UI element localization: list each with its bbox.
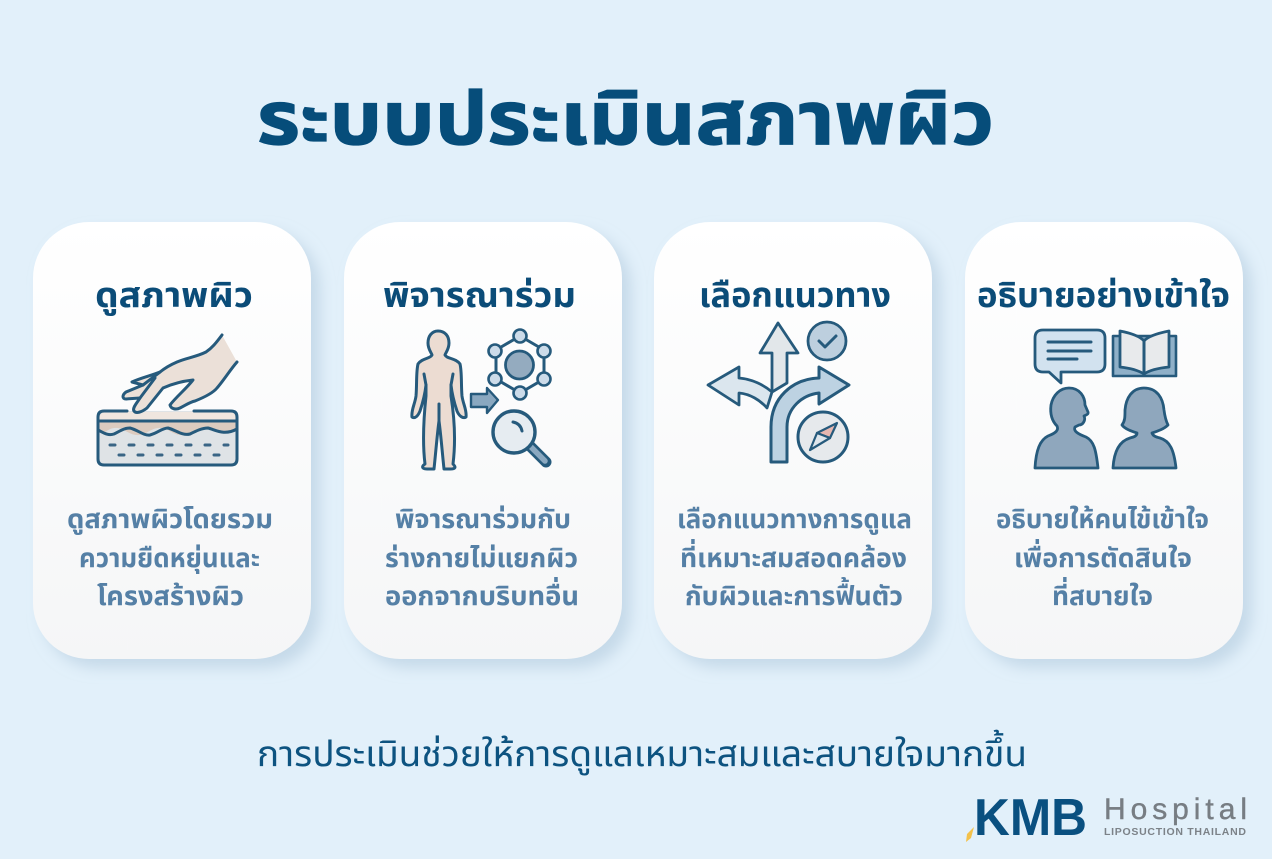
icon: hand on skin [98,335,237,465]
description: consider together [385,504,579,611]
heading: consider together: พิจารณาร่วม [383,276,576,315]
heading: look at skin: ดูสภาพผิว [95,276,253,316]
logo tagline: LIPOSUCTION THAILAND [1104,826,1246,838]
description: choose approach [677,504,912,611]
description: look at skin: ดูสภาพผิวโดยรวม [67,504,273,535]
description: look at skin [67,504,273,611]
panel: consider together [344,222,622,659]
description: explain clearly: อธิบายให้คนไข้เข้าใจ [996,504,1209,534]
description: choose approach: เลือกแนวทางการดูแล [677,504,912,535]
description: explain clearly [996,504,1209,611]
logo: KMB Hospital [966,789,1247,847]
title: ระบบประเมินสภาพผิว [257,77,994,160]
panel: look at skin [33,222,311,659]
heading: explain clearly: อธิบายอย่างเข้าใจ [977,276,1230,315]
description: consider together: ออกจากบริบทอื่น [385,577,579,611]
panel: explain clearly [965,222,1243,659]
description: look at skin: โครงสร้างผิว [97,581,244,611]
description: explain clearly: ที่สบายใจ [1052,577,1153,611]
logo hospital text: Hospital [1104,793,1247,826]
description: choose approach: กับผิวและการฟื้นตัว [685,577,903,611]
icon: speech bubble, book and two people [1035,330,1176,468]
icon: body, network and magnifier [412,330,550,469]
description: look at skin: ความยืดหยุ่นและ [79,543,260,574]
footer message: การประเมินช่วยให้การดูแลเหมาะสมและสบายใจมากขึ้น [257,729,1027,775]
description: choose approach: ที่เหมาะสมสอดคล้อง [680,539,907,573]
logo mark [966,827,974,842]
description: consider together: ร่างกายไม่แยกผิว [385,543,578,573]
panel: choose approach [654,222,932,659]
description: consider together: พิจารณาร่วมกับ [395,504,571,534]
icon: diverging arrows and compass [708,322,849,462]
description: explain clearly: เพื่อการตัดสินใจ [1014,539,1192,573]
heading: choose approach: เลือกแนวทาง [699,276,891,315]
logo wordmark: KMB [974,789,1087,847]
